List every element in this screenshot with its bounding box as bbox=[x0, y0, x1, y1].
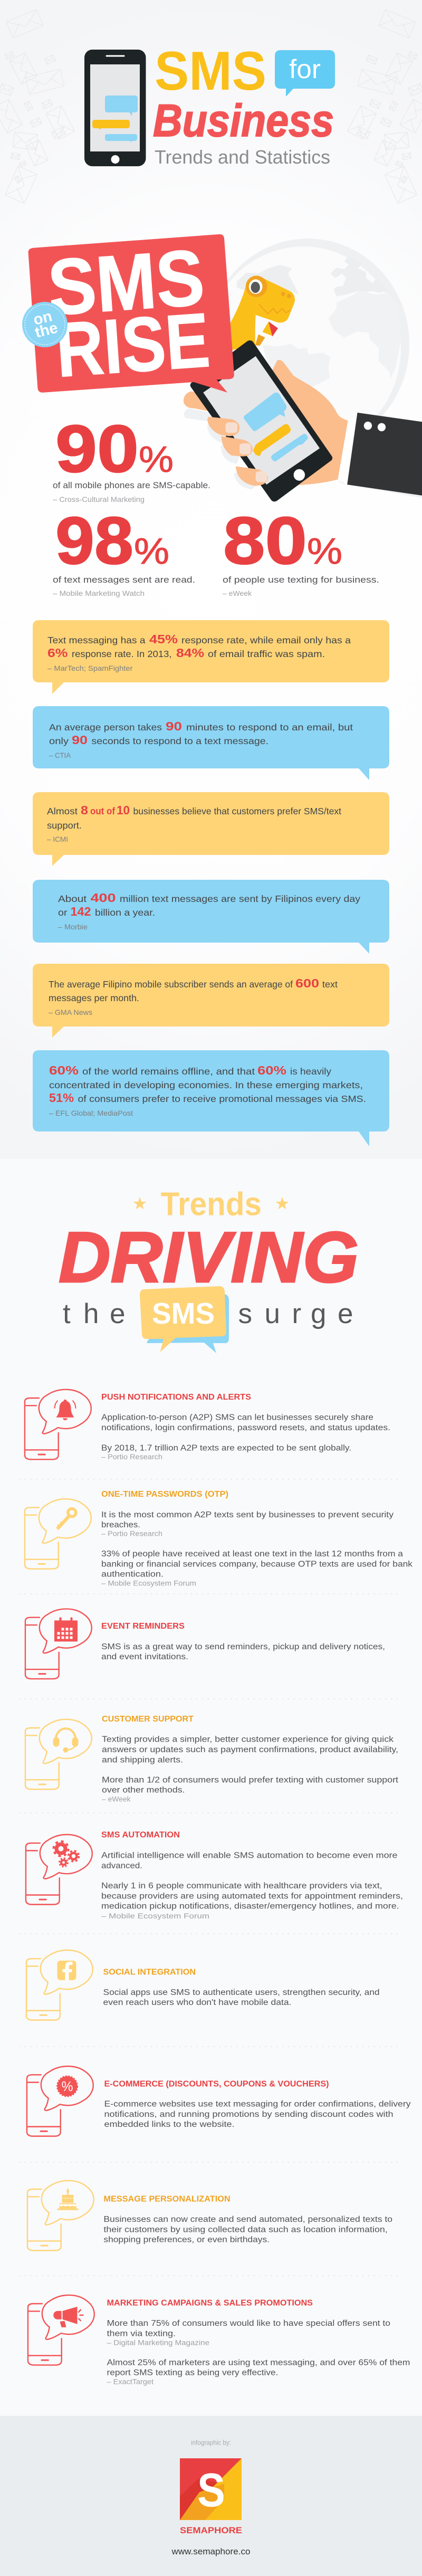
body text: – Mobile Ecosystem Forum bbox=[101, 1912, 209, 1920]
body text: breaches. bbox=[101, 1520, 140, 1529]
stat: 90 percent: 90 bbox=[55, 411, 139, 486]
callout: response rate: – MarTech; SpamFighter bbox=[47, 664, 133, 672]
body text: them via texting. bbox=[107, 2329, 176, 2338]
panel: customer support bbox=[25, 1715, 399, 1803]
heading: Trends driving the SMS surge: surge bbox=[238, 1298, 353, 1329]
heading: MESSAGE PERSONALIZATION bbox=[103, 2195, 231, 2204]
callout: response time: – CTIA bbox=[49, 751, 71, 759]
body text bbox=[101, 1642, 385, 1661]
callout: response time: seconds to respond to a text message. bbox=[92, 736, 268, 746]
callout: Filipino text volume: million text messages are sent by Filipinos every day bbox=[120, 893, 360, 904]
heading: SMS AUTOMATION bbox=[101, 1831, 180, 1840]
body text: – Digital Marketing Magazine bbox=[107, 2338, 209, 2346]
illustration: hand holding phone bbox=[184, 344, 422, 498]
callout: Filipino text volume: billion a year. bbox=[95, 907, 155, 918]
stat: 80 percent: – eWeek bbox=[223, 589, 252, 597]
stat: 90 percent: of all mobile phones are SMS-capable. bbox=[53, 481, 210, 490]
body text: – Mobile Ecosystem Forum bbox=[101, 1579, 196, 1587]
icon: discount badge in phone bbox=[27, 2066, 93, 2136]
callout: response time: minutes to respond to an email, but bbox=[186, 722, 353, 733]
body text: and event invitations. bbox=[101, 1652, 188, 1661]
body text: even reach users who don't have mobile data. bbox=[103, 1998, 291, 2007]
stat: 98 percent: of text messages sent are read. bbox=[53, 575, 195, 585]
for speech bubble bbox=[275, 50, 335, 97]
body text: Social apps use SMS to authenticate users, strengthen security, and bbox=[103, 1988, 380, 1997]
icon: key in phone bbox=[25, 1499, 91, 1569]
speech bubble: SMS Rise: RISE bbox=[53, 297, 212, 393]
callout: response time bbox=[33, 706, 389, 780]
callout: response rate: 84% bbox=[176, 646, 204, 660]
credit line: infographic by: bbox=[191, 2439, 231, 2447]
heading: Trends driving the SMS surge: Trends bbox=[160, 1186, 262, 1223]
icon: title phone bbox=[84, 50, 146, 166]
body text: 33% of people have received at least one text in the last 12 months from a bbox=[101, 1550, 403, 1558]
body text bbox=[101, 1413, 390, 1461]
callout: 8 out of 10: 8 bbox=[81, 803, 88, 817]
panel: one-time passwords bbox=[25, 1490, 413, 1587]
wordmark: SEMAPHORE bbox=[180, 2525, 242, 2535]
callout: Filipino text volume: About bbox=[58, 893, 87, 904]
callout: response rate: of email traffic was spam. bbox=[208, 649, 325, 659]
callout: monthly messages bbox=[33, 964, 389, 1038]
callout: 8 out of 10: – ICMI bbox=[47, 835, 68, 843]
callout: Filipino text volume: 400 bbox=[91, 891, 116, 905]
badge: on the: the bbox=[33, 319, 60, 341]
badge: on the: on bbox=[32, 308, 54, 329]
body text: SMS is as a great way to send reminders, pickup and delivery notices, bbox=[101, 1642, 385, 1651]
callout: response rate bbox=[33, 620, 389, 694]
body text bbox=[101, 1510, 413, 1587]
envelope pattern bbox=[0, 9, 422, 203]
body text: Artificial intelligence will enable SMS automation to become even more bbox=[101, 1851, 398, 1860]
body text: Texting provides a simpler, better customer experience for giving quick bbox=[102, 1735, 394, 1744]
icon: calendar in phone bbox=[25, 1609, 92, 1679]
stat: 98 percent bbox=[53, 503, 195, 597]
callout: response rate: Text messaging has a bbox=[47, 635, 146, 645]
body text: More than 1/2 of consumers would prefer texting with customer support bbox=[102, 1775, 399, 1784]
panel: social integration bbox=[26, 1950, 379, 2020]
callout: response rate: response rate. In 2013, bbox=[72, 649, 172, 659]
heading: ONE-TIME PASSWORDS (OTP) bbox=[101, 1490, 228, 1499]
heading: CUSTOMER SUPPORT bbox=[102, 1715, 194, 1724]
website: www.semaphore.co bbox=[171, 2546, 250, 2556]
panel: event reminders bbox=[25, 1609, 385, 1679]
body text bbox=[103, 1988, 380, 2007]
panel: e-commerce bbox=[27, 2066, 411, 2136]
body text: their customers by using collected data such as location information, bbox=[103, 2225, 388, 2234]
title: SMS for Business: Business bbox=[153, 96, 334, 146]
callout: response rate: 6% bbox=[47, 646, 68, 660]
body text bbox=[103, 2215, 392, 2244]
icon: gears in phone bbox=[26, 1834, 92, 1905]
body text: embedded links to the website. bbox=[104, 2120, 234, 2129]
callout: monthly messages: The average Filipino mobile subscriber sends an average of bbox=[49, 979, 293, 990]
body text: E-commerce websites use text messaging for order confirmations, delivery bbox=[104, 2100, 411, 2109]
body text: medication pickup notifications, disaster/emergency hotlines, and more. bbox=[101, 1902, 399, 1911]
body text: shopping preferences, or even birthdays. bbox=[103, 2235, 270, 2244]
callout: 8 out of 10: out of bbox=[90, 806, 116, 816]
callout: Filipino text volume: or bbox=[58, 907, 68, 918]
body text bbox=[107, 2319, 410, 2385]
body text: – ExactTarget bbox=[107, 2377, 154, 2385]
callout: 8 out of 10: businesses believe that customers prefer SMS/text bbox=[133, 806, 341, 816]
panel: SMS on the rise bbox=[22, 233, 422, 597]
stat: 80 percent: 80 bbox=[223, 503, 307, 578]
background: upper section bbox=[0, 0, 422, 1159]
stat: 90 percent bbox=[53, 411, 210, 503]
speech bubble: SMS Rise bbox=[22, 233, 234, 393]
stat: 80 percent: of people use texting for business. bbox=[223, 575, 379, 585]
body text: advanced. bbox=[101, 1861, 142, 1870]
callout: 8 out of 10: Almost bbox=[47, 806, 78, 816]
body text: Application-to-person (A2P) SMS can let businesses securely share bbox=[101, 1413, 373, 1422]
body text: – Portio Research bbox=[101, 1452, 162, 1461]
icon: star left bbox=[133, 1197, 146, 1210]
callout: Filipino text volume: 142 bbox=[71, 905, 91, 918]
heading: E-COMMERCE (DISCOUNTS, COUPONS & VOUCHERS) bbox=[104, 2079, 329, 2088]
callout: offline world: of the world remains offline, and that bbox=[82, 1066, 255, 1077]
SMS double bubble: SMS bbox=[152, 1297, 215, 1330]
body text: By 2018, 1.7 trillion A2P texts are expected to be sent globally. bbox=[101, 1443, 351, 1452]
callout: offline world: of consumers prefer to receive promotional messages via SMS. bbox=[78, 1094, 366, 1104]
stat: 90 percent: % bbox=[139, 439, 174, 480]
heading: EVENT REMINDERS bbox=[101, 1622, 185, 1631]
icon: discount badge in phone: % bbox=[61, 2078, 73, 2094]
heading: MARKETING CAMPAIGNS & SALES PROMOTIONS bbox=[107, 2298, 313, 2307]
stat: 98 percent: % bbox=[134, 530, 169, 572]
callout: offline world bbox=[33, 1050, 389, 1146]
body text: notifications, and running promotions by sending discount codes with bbox=[104, 2110, 394, 2119]
body text: More than 75% of consumers would like to have special offers sent to bbox=[107, 2319, 390, 2328]
callout: monthly messages: text bbox=[322, 979, 338, 990]
heading: PUSH NOTIFICATIONS AND ALERTS bbox=[101, 1393, 251, 1402]
badge: on the bbox=[22, 302, 68, 347]
body text: report SMS texting as being very effective. bbox=[107, 2369, 279, 2378]
logo: Semaphore bbox=[180, 2458, 242, 2520]
callout: offline world: concentrated in developing economies. In these emerging markets, bbox=[49, 1080, 363, 1090]
body text bbox=[102, 1735, 399, 1803]
callout: Filipino text volume bbox=[33, 880, 389, 954]
panel: message personalization bbox=[27, 2181, 392, 2250]
callout: offline world: 51% bbox=[49, 1091, 74, 1105]
illustration: dinosaur bbox=[229, 275, 295, 350]
callout: Filipino text volume: – Morbie bbox=[58, 923, 88, 931]
stat: 90 percent: – Cross-Cultural Marketing bbox=[53, 495, 145, 503]
callout: offline world: is heavily bbox=[290, 1066, 331, 1077]
body text: answers or updates such as payment confirmations, product availability, bbox=[102, 1745, 398, 1754]
body text: Nearly 1 in 6 people communicate with healthcare providers via text, bbox=[101, 1881, 382, 1890]
callout: response time: An average person takes bbox=[49, 722, 162, 733]
callout: response rate: response rate, while email only has a bbox=[181, 635, 351, 645]
illustration: globe bbox=[206, 239, 409, 450]
body text: It is the most common A2P texts sent by businesses to prevent security bbox=[101, 1510, 394, 1519]
SMS double bubble bbox=[140, 1286, 229, 1353]
callout: response rate: 45% bbox=[149, 632, 178, 646]
stat: 80 percent: % bbox=[307, 530, 342, 572]
panel: marketing campaigns bbox=[28, 2295, 410, 2385]
panel: SMS automation bbox=[26, 1831, 403, 1920]
callout: monthly messages: – GMA News bbox=[49, 1008, 92, 1016]
body text: and shipping alerts. bbox=[102, 1755, 183, 1764]
heading: SOCIAL INTEGRATION bbox=[103, 1967, 196, 1976]
title: SMS for Business bbox=[153, 41, 335, 168]
body text bbox=[104, 2100, 411, 2129]
heading: Trends driving the SMS surge bbox=[59, 1186, 359, 1353]
callout: offline world: 60% bbox=[49, 1063, 79, 1077]
body text: because providers are using automated texts for appointment reminders, bbox=[101, 1891, 403, 1900]
callout: monthly messages: 600 bbox=[295, 976, 319, 990]
icon: bell in phone bbox=[25, 1390, 91, 1459]
callout: 8 out of 10: support. bbox=[47, 820, 82, 831]
icon: megaphone in phone bbox=[28, 2295, 94, 2365]
callout: response time: 90 bbox=[166, 719, 182, 733]
background: trends section bbox=[0, 1159, 422, 2416]
body text: Almost 25% of marketers are using text messaging, and over 65% of them bbox=[107, 2358, 410, 2367]
body text: banking or financial services company, because OTP texts are used for bank bbox=[101, 1560, 413, 1569]
title: SMS for Business: SMS bbox=[155, 41, 266, 102]
logo: Semaphore: S bbox=[197, 2464, 225, 2517]
title: SMS for Business: Trends and Statistics bbox=[155, 146, 330, 168]
body text: – eWeek bbox=[102, 1794, 131, 1803]
for speech bubble: for bbox=[289, 54, 321, 84]
callout: 8 out of 10: 10 bbox=[117, 803, 130, 817]
icon: cake in phone bbox=[27, 2181, 94, 2250]
icon: facebook in phone bbox=[26, 1950, 93, 2020]
callout: response time: 90 bbox=[72, 733, 88, 747]
speech bubble: SMS Rise: SMS bbox=[45, 233, 207, 332]
callout: offline world: – EFL Global; MediaPost bbox=[49, 1109, 133, 1117]
body text: over other methods. bbox=[102, 1786, 185, 1795]
stat: 98 percent: – Mobile Marketing Watch bbox=[53, 589, 145, 597]
icon: headset in phone bbox=[25, 1719, 92, 1789]
heading: Trends driving the SMS surge: DRIVING bbox=[59, 1217, 359, 1297]
callout: 8 out of 10 bbox=[33, 792, 389, 866]
callout: response time: only bbox=[49, 736, 69, 746]
icon: star right bbox=[276, 1197, 289, 1210]
stat: 98 percent: 98 bbox=[55, 503, 133, 578]
heading: Trends driving the SMS surge: the bbox=[63, 1298, 125, 1329]
body text: – Portio Research bbox=[101, 1529, 162, 1538]
body text: authentication. bbox=[101, 1570, 164, 1579]
panel: footer bbox=[0, 2416, 422, 2576]
body text: Businesses can now create and send automated, personalized texts to bbox=[103, 2215, 392, 2224]
callout: offline world: 60% bbox=[257, 1063, 286, 1077]
stat: 80 percent bbox=[223, 503, 379, 597]
panel: push notifications bbox=[25, 1390, 390, 1461]
callout: monthly messages: messages per month. bbox=[49, 993, 139, 1003]
body text: notifications, login confirmations, password resets, and status updates. bbox=[101, 1423, 390, 1432]
body text bbox=[101, 1851, 403, 1920]
